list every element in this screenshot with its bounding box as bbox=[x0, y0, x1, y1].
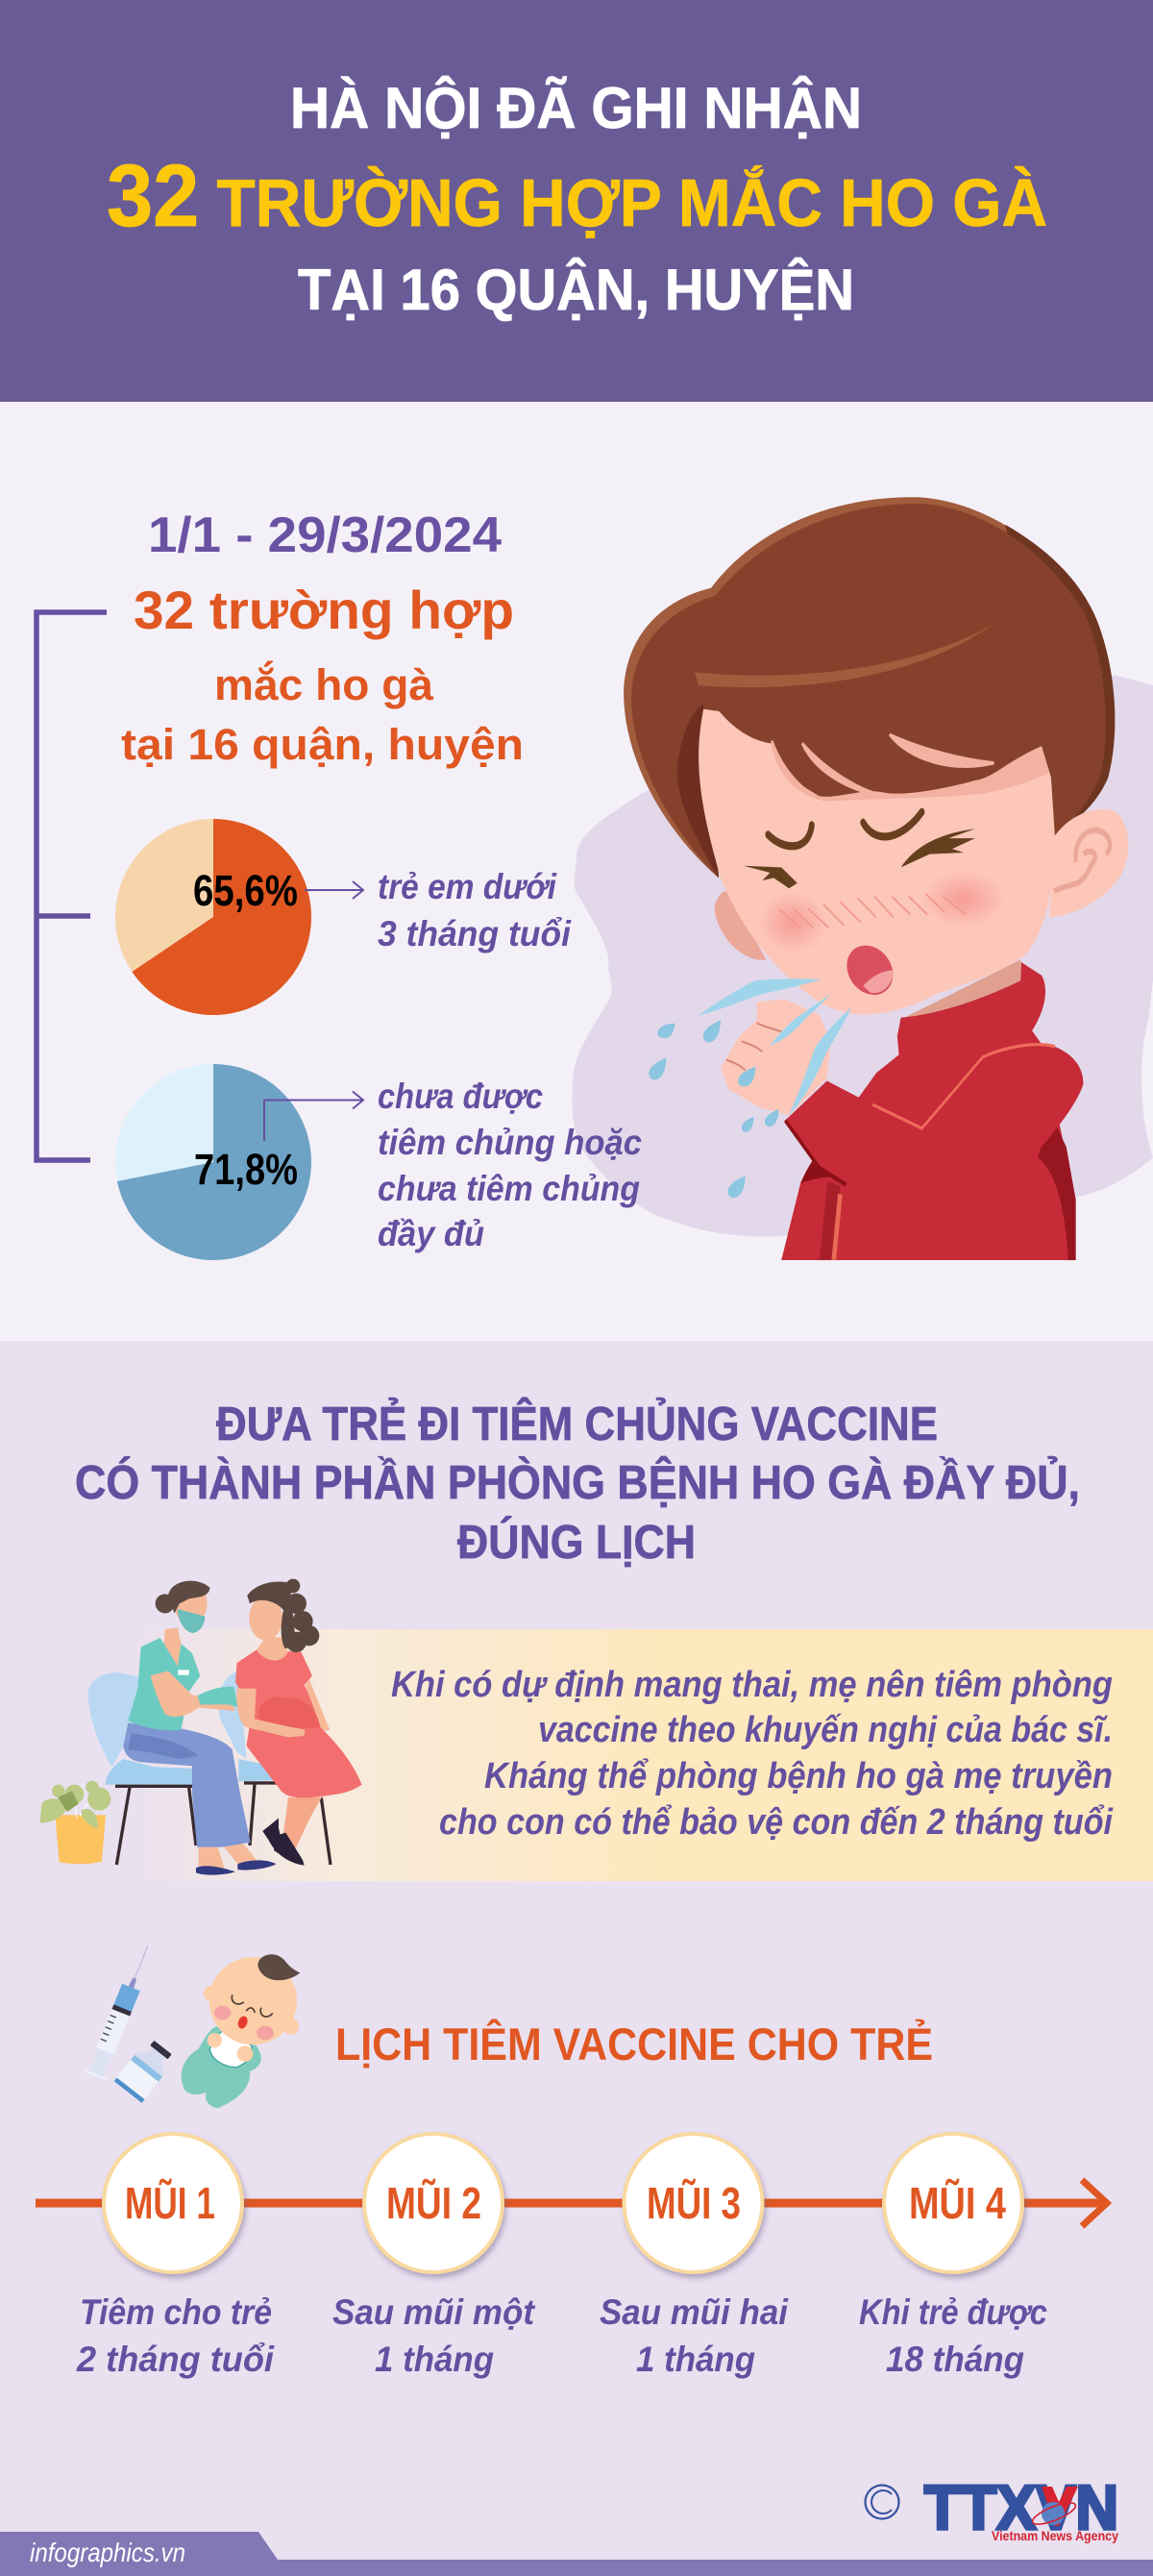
icon: potted plant bbox=[40, 1781, 110, 1864]
dose 4: MŨI 4 bbox=[909, 2178, 1006, 2228]
callout band bbox=[115, 1629, 1153, 1881]
heading: vaccination advice: ĐÚNG LỊCH bbox=[457, 1516, 696, 1569]
heading: vaccine schedule: LỊCH TIÊM VACCINE CHO TRẺ bbox=[335, 2019, 933, 2069]
title line 3: TẠI 16 QUẬN, HUYỆN bbox=[298, 258, 854, 322]
dose 4: 18 tháng bbox=[886, 2340, 1024, 2379]
callout text bbox=[391, 1665, 1114, 1843]
arrow: pie one to label bbox=[305, 881, 363, 899]
arrow: pie two to label bbox=[264, 1092, 363, 1141]
dose 1 bbox=[76, 2134, 275, 2379]
chair: right bbox=[219, 1671, 247, 1759]
copyright mark bbox=[865, 2486, 899, 2518]
label: under 3 months: trẻ em dưới bbox=[378, 867, 557, 906]
footer bar with source tab: infographics.vn bbox=[30, 2538, 185, 2567]
stat: disease: mắc ho gà bbox=[214, 660, 434, 709]
heading: vaccination advice bbox=[75, 1398, 1080, 1569]
dose 2: Sau mũi một bbox=[332, 2292, 536, 2332]
icon: sleeping baby bbox=[182, 1954, 300, 2108]
label: not fully vaccinated: tiêm chủng hoặc bbox=[378, 1123, 642, 1162]
heading: vaccination advice: CÓ THÀNH PHẦN PHÒNG BỆNH HO GÀ ĐẦY ĐỦ, bbox=[75, 1456, 1080, 1509]
pie chart: 71,8% bbox=[115, 1064, 311, 1260]
label: under 3 months: 3 tháng tuổi bbox=[378, 914, 572, 954]
illustration: nurse vaccinating pregnant woman bbox=[40, 1579, 362, 1875]
date range: 1/1 - 29/3/2024 bbox=[148, 508, 502, 563]
bracket connector bbox=[37, 612, 107, 1160]
dose 2 bbox=[332, 2134, 536, 2379]
panel: statistics and coughing child bbox=[0, 402, 1153, 1341]
dose 2: 1 tháng bbox=[375, 2340, 494, 2379]
illustration: coughing boy bbox=[624, 497, 1128, 1260]
timeline axis with arrow bbox=[36, 2180, 1107, 2226]
pie chart: 65,6% bbox=[115, 819, 311, 1015]
title line 2: 32 TRƯỜNG HỢP MẮC HO GÀ bbox=[107, 147, 1047, 245]
dose 1: MŨI 1 bbox=[125, 2178, 215, 2228]
background blob bbox=[572, 675, 1153, 1237]
label: under 3 months bbox=[378, 867, 572, 954]
dose 2: MŨI 2 bbox=[386, 2178, 481, 2228]
patient bbox=[235, 1579, 362, 1866]
stat: districts: tại 16 quận, huyện bbox=[121, 720, 524, 769]
chair: left bbox=[88, 1672, 141, 1767]
label: not fully vaccinated bbox=[378, 1077, 642, 1253]
label: not fully vaccinated: chưa được bbox=[378, 1077, 543, 1116]
pie chart: 65,6%: 65,6% bbox=[193, 866, 298, 915]
icon: syringe bbox=[83, 1941, 300, 2108]
title line 1: HÀ NỘI ĐÃ GHI NHẬN bbox=[290, 76, 862, 140]
label: not fully vaccinated: chưa tiêm chủng bbox=[378, 1169, 640, 1208]
panel: vaccination advice and schedule bbox=[0, 1341, 1153, 2576]
logo: TTXVN: TTXVN bbox=[924, 2472, 1118, 2542]
dose 1: Tiêm cho trẻ bbox=[80, 2292, 272, 2332]
footer bar with source tab bbox=[0, 2532, 1153, 2576]
dose 3: Sau mũi hai bbox=[600, 2292, 789, 2332]
dose 4: Khi trẻ được bbox=[859, 2292, 1047, 2332]
pie chart: 71,8%: 71,8% bbox=[194, 1145, 298, 1194]
logo: TTXVN: Vietnam News Agency bbox=[992, 2528, 1118, 2543]
nurse bbox=[123, 1581, 277, 1875]
dose 3 bbox=[600, 2134, 789, 2379]
dose 4 bbox=[859, 2134, 1047, 2379]
dose 3: MŨI 3 bbox=[647, 2178, 741, 2228]
icon: vaccine vial bbox=[114, 2037, 177, 2103]
heading: vaccination advice: ĐƯA TRẺ ĐI TIÊM CHỦNG VACCINE bbox=[216, 1398, 938, 1450]
dose 3: 1 tháng bbox=[636, 2340, 755, 2379]
label: not fully vaccinated: đầy đủ bbox=[378, 1214, 484, 1253]
dose 1: 2 tháng tuổi bbox=[76, 2340, 275, 2379]
stat: 32 cases: 32 trường hợp bbox=[134, 580, 514, 640]
panel: header bbox=[0, 0, 1153, 402]
